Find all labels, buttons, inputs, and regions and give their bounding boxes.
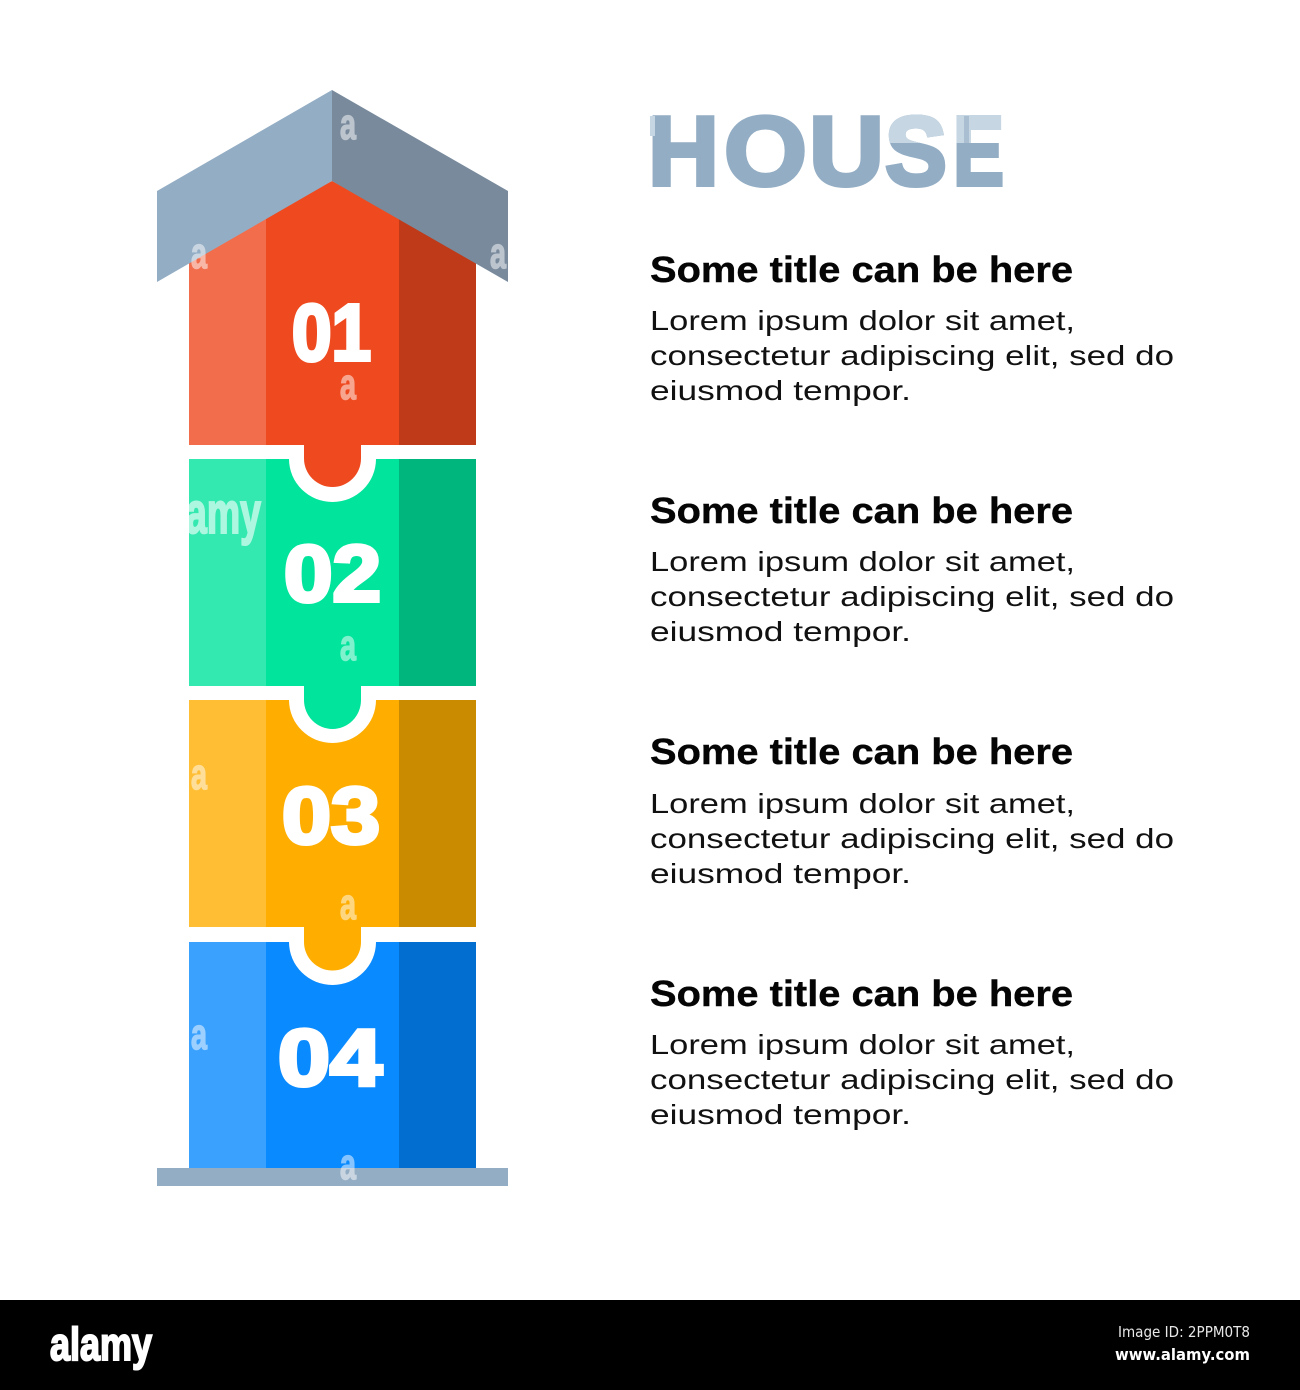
panel: step 03 orange block: 03 (282, 771, 380, 860)
text block: step 2: eiusmod tempor. (650, 616, 911, 647)
panel: step 03 orange block (189, 700, 476, 970)
footer logo: alamy (50, 1318, 152, 1370)
title watermark overlay: S (885, 96, 947, 206)
panel: step 01 red block (189, 181, 476, 487)
panel: step 01 red block: 01 (292, 288, 371, 377)
title (648, 96, 1004, 206)
image watermarks: a (191, 750, 207, 799)
text block: step 3 (650, 731, 1174, 889)
image watermarks: a (340, 360, 356, 409)
title: H (648, 96, 719, 206)
title: U (809, 96, 884, 206)
base (157, 1168, 508, 1186)
text block: step 1: consectetur adipiscing elit, sed do (650, 340, 1174, 371)
image watermarks (186, 100, 506, 1189)
image watermarks: a (191, 229, 207, 278)
text block: step 1 (650, 249, 1174, 406)
text block: step 4 (650, 973, 1174, 1130)
panel: step 02 green block (189, 459, 476, 729)
image watermarks: a (340, 100, 356, 149)
panel: step 04 blue block: 04 (278, 1013, 383, 1102)
text block: step 4: eiusmod tempor. (650, 1099, 911, 1130)
text block: step 2 (650, 490, 1174, 647)
text block: step 1: Some title can be here (650, 249, 1073, 290)
text block: step 2: Lorem ipsum dolor sit amet, (650, 546, 1075, 577)
image watermarks: a (340, 1140, 356, 1189)
title watermark overlay: E (953, 96, 1004, 206)
image watermarks: a (191, 1010, 207, 1059)
image watermarks: a (340, 621, 356, 670)
text block: step 4: Some title can be here (650, 973, 1073, 1014)
image watermarks: a (340, 880, 356, 929)
title: E (953, 96, 1004, 206)
footer image id: Image ID: 2PPM0T8 (1118, 1323, 1250, 1341)
text block: step 4: consectetur adipiscing elit, sed do (650, 1064, 1174, 1095)
text block: step 3: consectetur adipiscing elit, sed do (650, 823, 1174, 854)
image watermarks: amy (186, 481, 261, 546)
panel: step 04 blue block (189, 942, 476, 1169)
roof (157, 90, 508, 282)
text block: step 1: eiusmod tempor. (650, 375, 911, 406)
text block: step 3: Lorem ipsum dolor sit amet, (650, 788, 1075, 819)
title watermark overlay (650, 114, 1001, 143)
title: S (885, 96, 947, 206)
footer website: www.alamy.com (1115, 1345, 1250, 1364)
image watermarks: a (490, 229, 506, 278)
text block: step 3: Some title can be here (650, 731, 1073, 772)
panel: step 02 green block: 02 (284, 529, 381, 618)
title: O (724, 96, 807, 206)
text block: step 2: consectetur adipiscing elit, sed do (650, 581, 1174, 612)
house illustration (157, 90, 508, 1186)
text block: step 2: Some title can be here (650, 490, 1073, 531)
text block: step 1: Lorem ipsum dolor sit amet, (650, 305, 1075, 336)
text block: step 3: eiusmod tempor. (650, 858, 911, 889)
text block: step 4: Lorem ipsum dolor sit amet, (650, 1029, 1075, 1060)
footer bar (0, 1300, 1300, 1390)
